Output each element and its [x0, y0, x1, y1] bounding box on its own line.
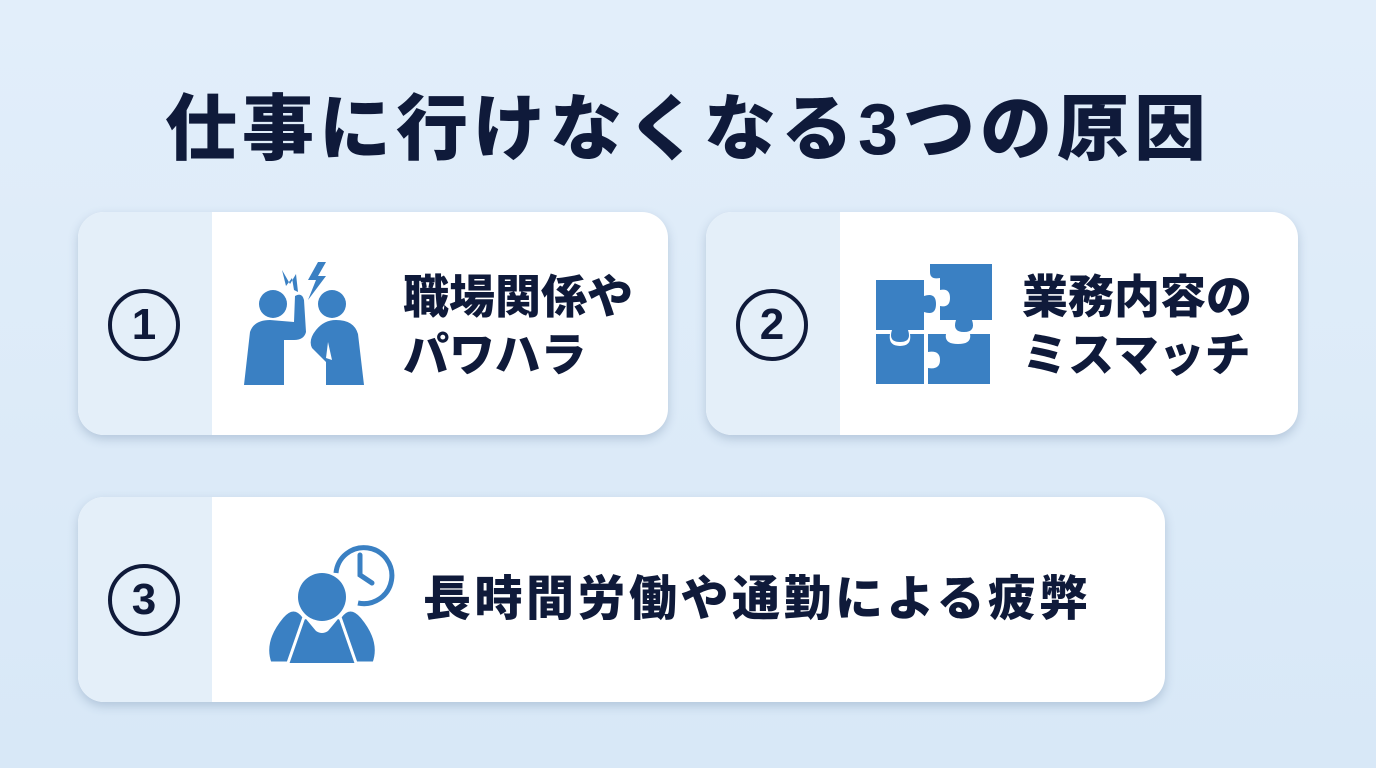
- text: cause 2: [1022, 271, 1252, 381]
- text: cause 1: パワハラ: [403, 329, 587, 381]
- number 3: 3: [132, 575, 156, 624]
- number 2: 2: [760, 300, 784, 349]
- number 1: [108, 289, 180, 361]
- number 1: 1: [132, 300, 156, 349]
- icon: tired person with clock: [269, 545, 394, 663]
- text: cause 3: 長時間労働や通勤による疲弊: [423, 573, 1091, 626]
- panel: cause 1: [78, 212, 668, 435]
- text: cause 1: 職場関係や: [403, 271, 633, 323]
- icon: arguing people: [244, 262, 364, 385]
- icon: puzzle: [876, 264, 992, 384]
- number 3: [108, 564, 180, 636]
- title: 仕事に行けなくなる3つの原因: [165, 90, 1211, 170]
- panel: cause 3: [78, 497, 1165, 702]
- panel: cause 2: [706, 212, 1298, 435]
- text: cause 1: [403, 271, 633, 381]
- text: cause 2: 業務内容の: [1022, 271, 1252, 323]
- text: cause 2: ミスマッチ: [1022, 329, 1251, 381]
- number 2: [736, 289, 808, 361]
